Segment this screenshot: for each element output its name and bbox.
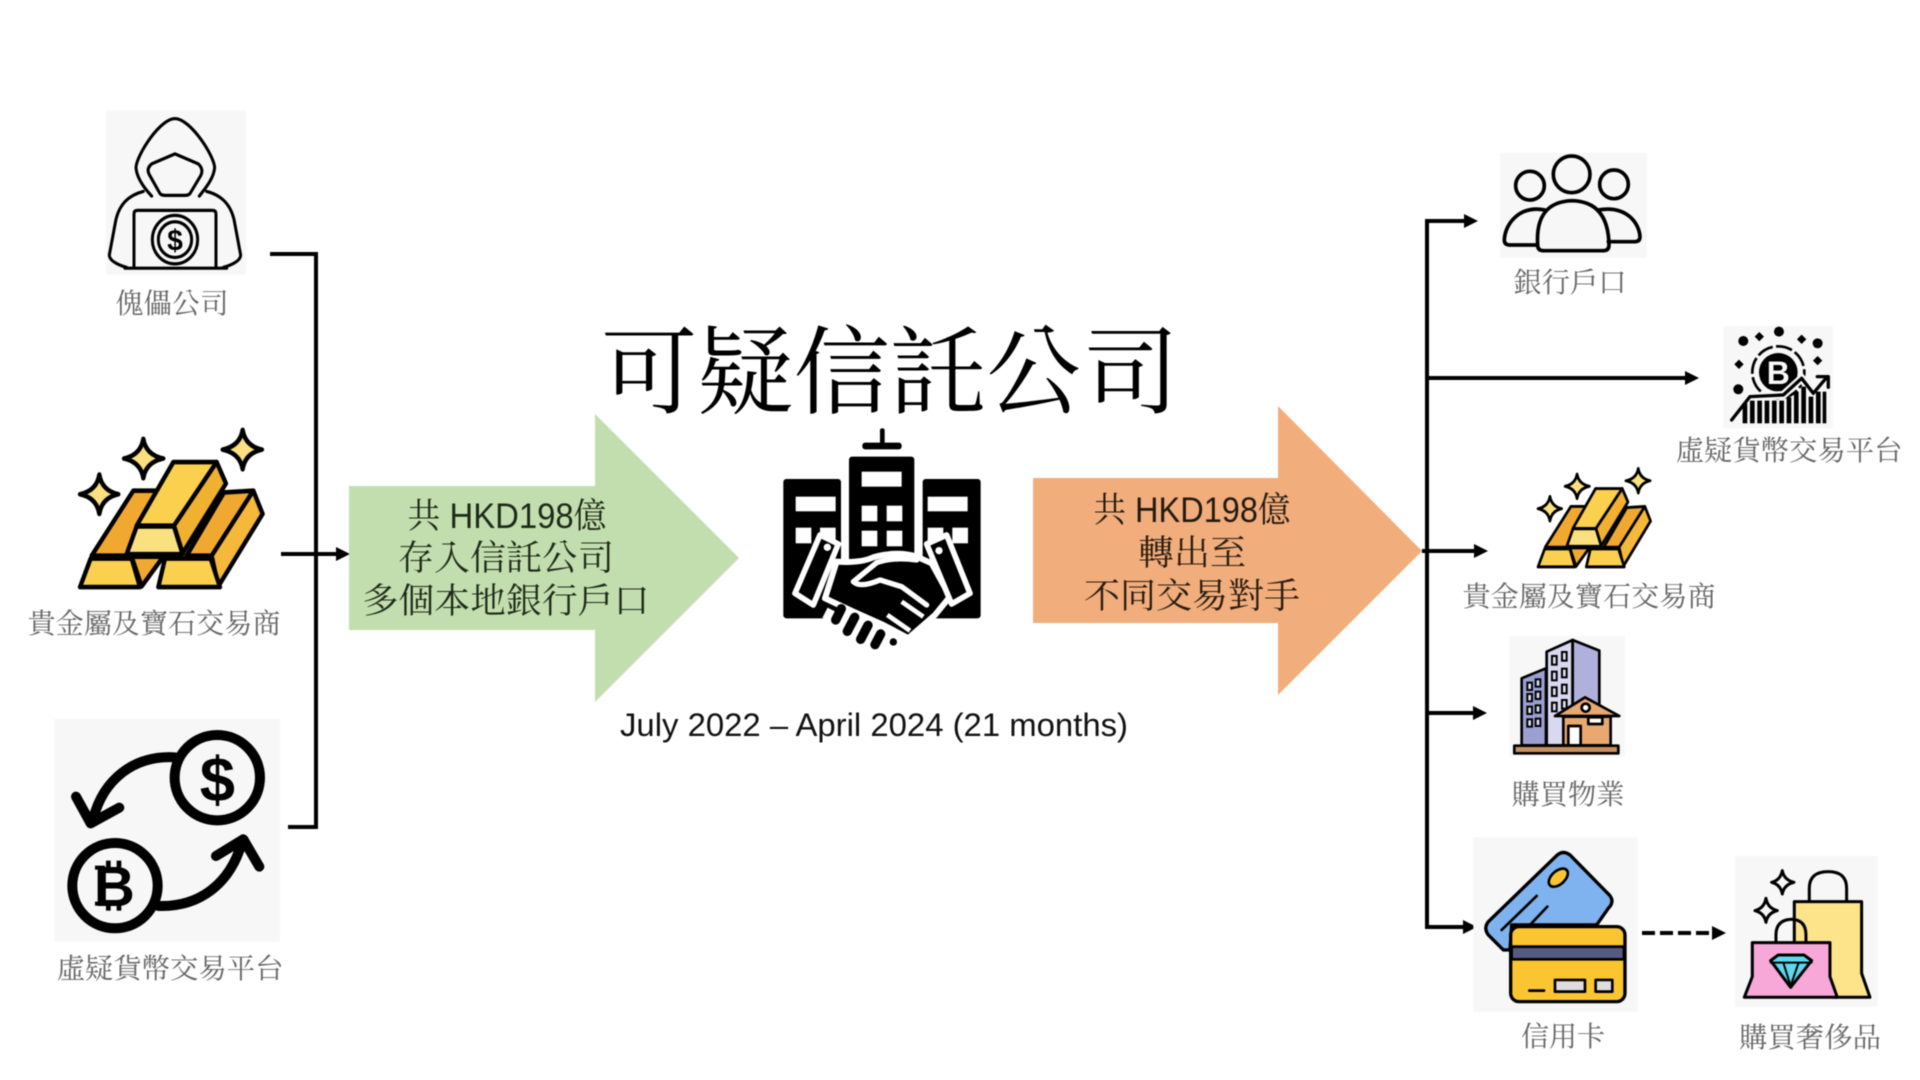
text: inflow amount: 多個本地銀行戶口	[362, 582, 650, 621]
icon: crypto exchange swap: $	[200, 745, 235, 815]
label: buy luxury goods: 購買奢侈品	[1739, 1022, 1881, 1054]
text: outflow amount	[1084, 491, 1300, 616]
title: 可疑信託公司	[601, 320, 1179, 427]
icon: bitcoin trading chart: B	[1767, 355, 1790, 391]
icon: crypto exchange swap: B	[94, 856, 135, 919]
text: inflow amount: 共 HKD198億	[408, 497, 607, 536]
icon: bitcoin trading chart	[1723, 326, 1833, 428]
icon: luxury shopping bags	[1735, 856, 1878, 1007]
text: date range: July 2022 – April 2024 (21 months)	[620, 707, 1128, 743]
icon: crypto exchange swap	[54, 719, 280, 942]
icon: gold bars right	[1538, 468, 1651, 567]
icon: gold bars left	[80, 430, 263, 587]
arrow: orange outflow	[1033, 406, 1422, 695]
text: outflow amount: 不同交易對手	[1084, 577, 1300, 616]
icon: hooded hacker with laptop	[106, 110, 246, 275]
arrow: inflow bracket	[270, 254, 350, 827]
label: credit card: 信用卡	[1521, 1021, 1605, 1053]
text: inflow amount: 存入信託公司	[398, 539, 614, 578]
icon: credit cards	[1473, 837, 1638, 1012]
label: crypto platform left: 虛疑貨幣交易平台	[56, 953, 284, 985]
text: outflow amount: 轉出至	[1138, 534, 1246, 573]
text: inflow amount	[362, 497, 650, 621]
label: puppet company: 傀儡公司	[116, 288, 228, 320]
label: precious metals dealer right: 貴金屬及寶石交易商	[1462, 581, 1716, 613]
icon: buildings and handshake	[783, 428, 981, 653]
arrow: green inflow	[349, 414, 739, 702]
icon: people (bank accounts)	[1500, 153, 1647, 258]
label: crypto platform right: 虛疑貨幣交易平台	[1676, 435, 1902, 467]
icon: hooded hacker with laptop: $	[167, 225, 183, 258]
text: outflow amount: 共 HKD198億	[1094, 491, 1291, 530]
arrow: outflow branches	[1422, 214, 1699, 934]
arrow: dashed to luxury	[1642, 926, 1726, 940]
icon: property buildings	[1509, 636, 1625, 757]
label: bank accounts: 銀行戶口	[1514, 267, 1626, 299]
label: precious metals dealer left: 貴金屬及寶石交易商	[28, 608, 280, 640]
label: buy property: 購買物業	[1512, 779, 1625, 811]
